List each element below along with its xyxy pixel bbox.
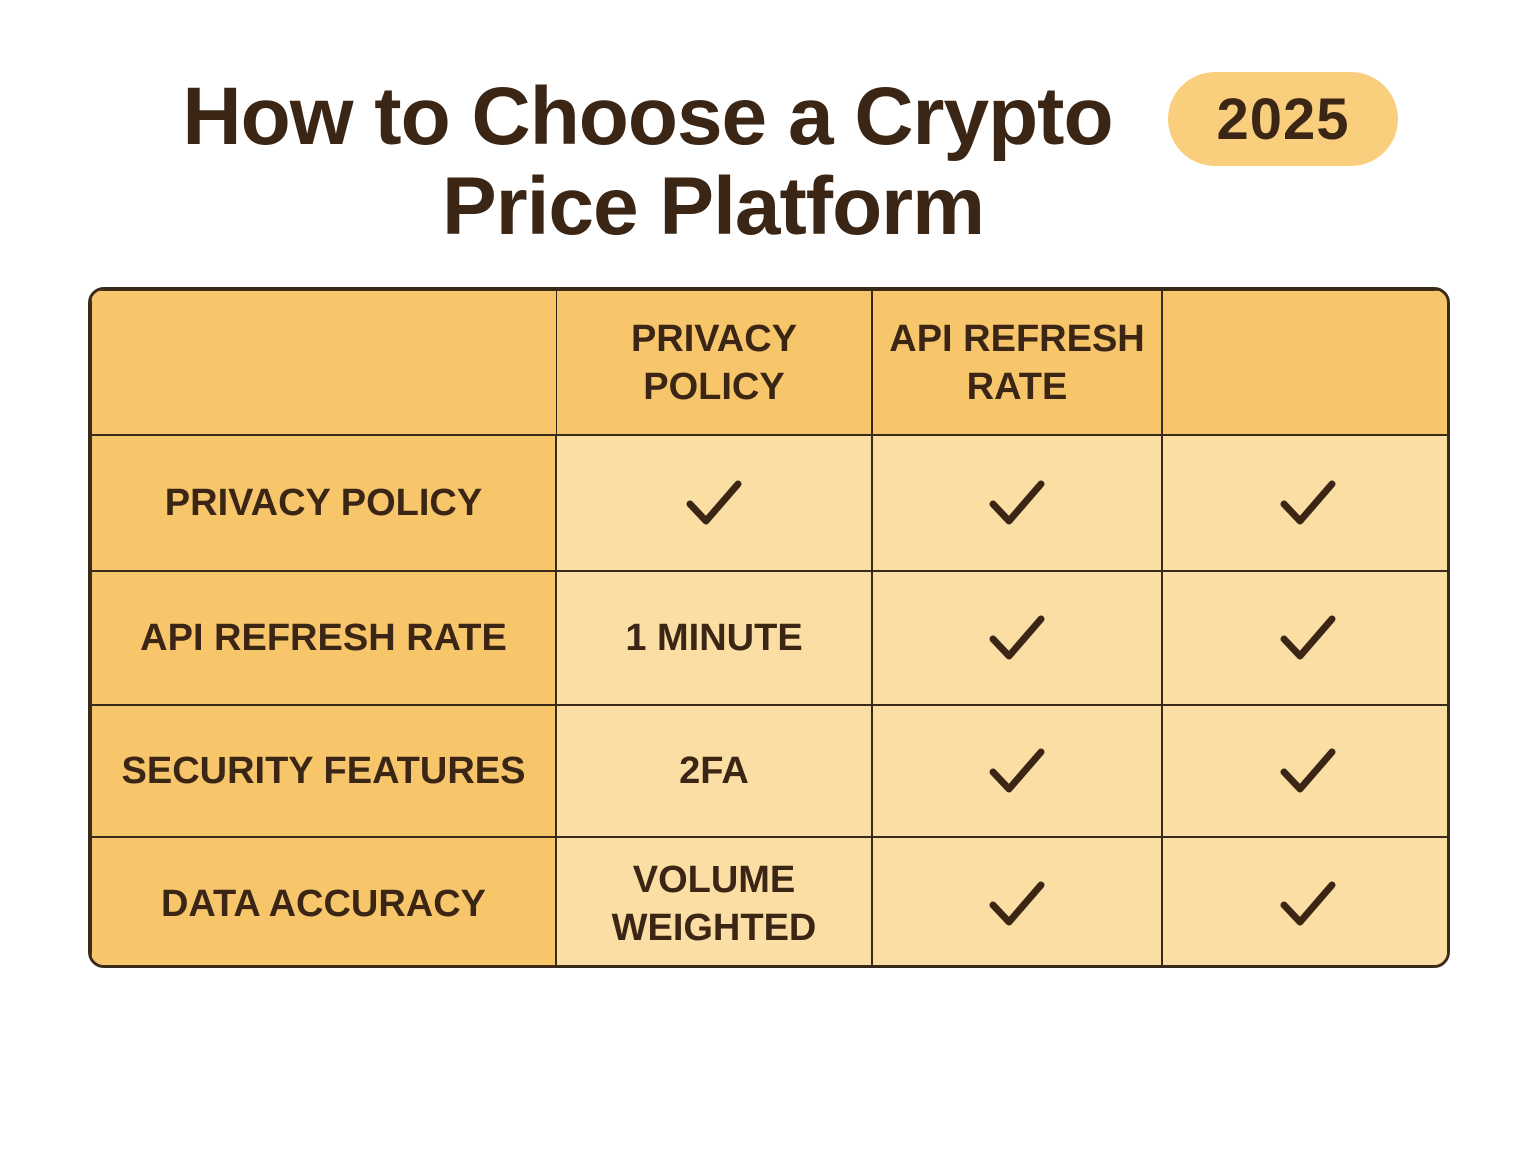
comparison table: VOLUME [633, 859, 795, 901]
column 2 checks [872, 435, 1162, 571]
comparison table: RATE [967, 366, 1067, 408]
title: How to Choose a Crypto [182, 71, 1113, 162]
comparison table: SECURITY FEATURES [122, 750, 525, 792]
title [182, 71, 1113, 252]
title: Price Platform [442, 161, 984, 252]
row labels [91, 435, 556, 571]
comparison table: WEIGHTED [612, 907, 816, 949]
header row [91, 290, 558, 435]
badge: 2025: 2025 [1216, 86, 1350, 152]
column 1 values [556, 435, 872, 571]
comparison table: DATA ACCURACY [161, 883, 486, 925]
comparison table: 2FA [679, 750, 749, 792]
column 3 checks [1162, 435, 1454, 571]
comparison table: API REFRESH [889, 318, 1145, 360]
comparison table: POLICY [643, 366, 785, 408]
comparison table: PRIVACY [631, 318, 797, 360]
comparison table [88, 287, 1450, 968]
comparison table: API REFRESH RATE [140, 617, 507, 659]
badge: 2025 [1168, 72, 1398, 166]
comparison table: 1 MINUTE [625, 617, 803, 659]
row labels: PRIVACY POLICY [165, 482, 482, 524]
